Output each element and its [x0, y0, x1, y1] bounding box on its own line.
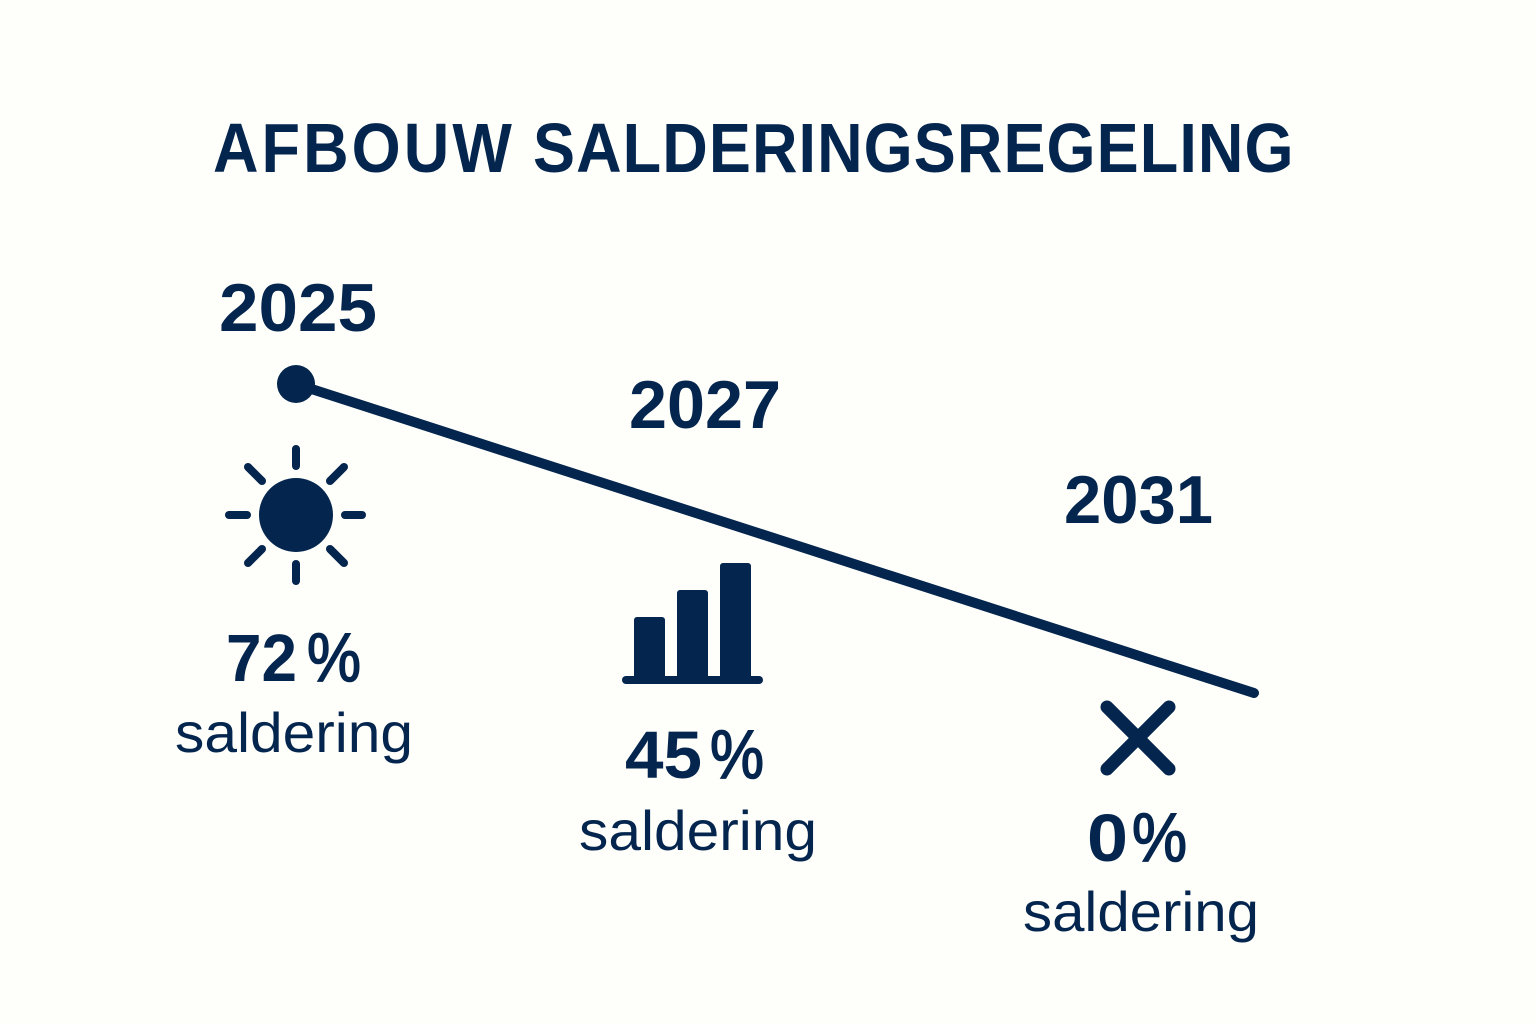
icon: bar chart	[622, 563, 763, 684]
percentage 45%	[625, 716, 764, 793]
percentage 45%: 45	[625, 718, 702, 793]
percentage 45%: %	[710, 716, 764, 793]
year 2031: 2031	[1064, 462, 1213, 538]
year 2027: 2027	[629, 367, 781, 443]
timeline line	[277, 365, 1254, 693]
label saldering 2025: saldering	[175, 701, 413, 764]
label saldering 2027: saldering	[579, 799, 817, 862]
percentage 72%	[226, 619, 361, 696]
icon: sun	[229, 449, 362, 581]
percentage 0%: 0	[1087, 801, 1128, 876]
percentage 72%: 72	[226, 621, 297, 696]
percentage 72%: %	[307, 619, 361, 696]
title: AFBOUW	[213, 110, 512, 188]
title: SALDERINGSREGELING	[533, 110, 1294, 188]
percentage 0%	[1087, 799, 1187, 876]
icon: cross	[1107, 707, 1169, 769]
label saldering 2031: saldering	[1023, 880, 1259, 943]
percentage 0%: %	[1132, 799, 1187, 876]
year 2025: 2025	[219, 270, 377, 346]
